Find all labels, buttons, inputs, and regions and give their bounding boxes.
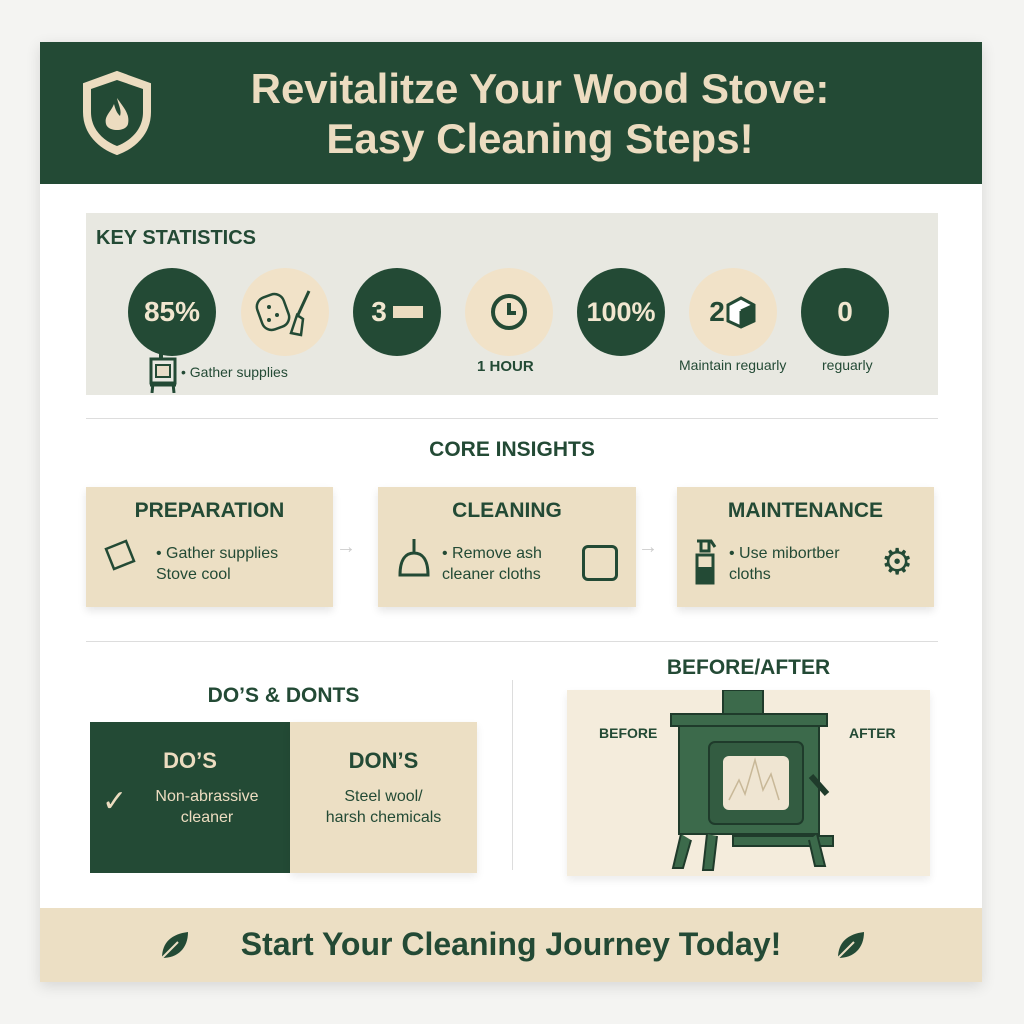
stat 2 — [689, 268, 777, 356]
stat 85%: 85% — [144, 296, 200, 327]
title: Easy Cleaning Steps! — [326, 115, 754, 162]
icon: clock — [465, 268, 553, 356]
heading: key statistics: KEY STATISTICS — [96, 227, 256, 249]
icon: spray bottle — [696, 540, 716, 584]
illustration: stove — [670, 690, 834, 871]
panel: do's: DO’S — [163, 748, 217, 773]
card: maintenance — [677, 487, 934, 607]
icon: small stove — [150, 354, 176, 393]
footer text: Start Your Cleaning Journey Today! — [241, 926, 781, 962]
title: Revitalitze Your Wood Stove: — [251, 65, 829, 112]
panel: key statistics: reguarly — [822, 357, 873, 373]
stat 85% — [128, 268, 216, 356]
icon: leaf right — [838, 932, 864, 958]
stat 0: 0 — [837, 296, 853, 327]
icon: check thermometer: ✓ — [102, 785, 127, 818]
panel: don'ts: harsh chemicals — [326, 809, 441, 826]
card: maintenance: cloths — [729, 566, 771, 583]
stat 100%: 100% — [586, 296, 656, 326]
panel: don'ts — [290, 722, 477, 873]
icon: shield — [83, 70, 151, 155]
icon: sponge — [582, 545, 618, 581]
arrow: → — [638, 536, 658, 558]
icon: leaf left — [162, 932, 188, 958]
arrow: → — [336, 536, 356, 558]
panel: before/after stove: BEFORE — [599, 725, 657, 741]
title — [251, 65, 829, 162]
stat 3 — [353, 268, 441, 356]
panel: key statistics: Maintain reguarly — [679, 357, 786, 373]
card: cleaning — [378, 487, 636, 607]
stat 0 — [801, 268, 889, 356]
card: maintenance: • Use mibortber — [729, 545, 840, 562]
panel: do's — [90, 722, 290, 873]
panel: don'ts: DON’S — [349, 748, 418, 773]
card: preparation: • Gather supplies — [156, 545, 278, 562]
card: maintenance: MAINTENANCE — [728, 499, 883, 522]
panel: don'ts: Steel wool/ — [344, 788, 423, 805]
card: cleaning: • Remove ash — [442, 545, 542, 562]
stat 2: 2 — [709, 296, 725, 327]
card: preparation — [86, 487, 333, 607]
card: cleaning: CLEANING — [452, 499, 562, 522]
stat 100% — [577, 268, 665, 356]
icon: cloth — [104, 539, 136, 571]
panel: do's: Non-abrassive — [155, 788, 259, 805]
icon: dustpan — [398, 539, 430, 576]
labels: • Gather supplies — [181, 364, 288, 380]
heading: do's & donts: DO’S & DONTS — [208, 684, 359, 707]
heading: before/after: BEFORE/AFTER — [667, 656, 830, 679]
panel: key statistics: 1 HOUR — [477, 358, 534, 375]
panel: before/after stove — [567, 690, 930, 876]
footer banner — [40, 908, 982, 982]
card: preparation: PREPARATION — [135, 499, 284, 522]
panel: key statistics — [86, 213, 938, 395]
card: preparation: Stove cool — [156, 566, 231, 583]
stat 3: 3 — [371, 296, 387, 327]
heading: core insights: CORE INSIGHTS — [429, 438, 595, 461]
icon: sponge brush — [241, 268, 329, 356]
card: cleaning: cleaner cloths — [442, 566, 541, 583]
icon: gear tools: ⚙ — [881, 541, 913, 582]
panel: do's: cleaner — [181, 809, 233, 826]
header banner — [40, 42, 982, 184]
panel: before/after stove: AFTER — [849, 725, 896, 741]
